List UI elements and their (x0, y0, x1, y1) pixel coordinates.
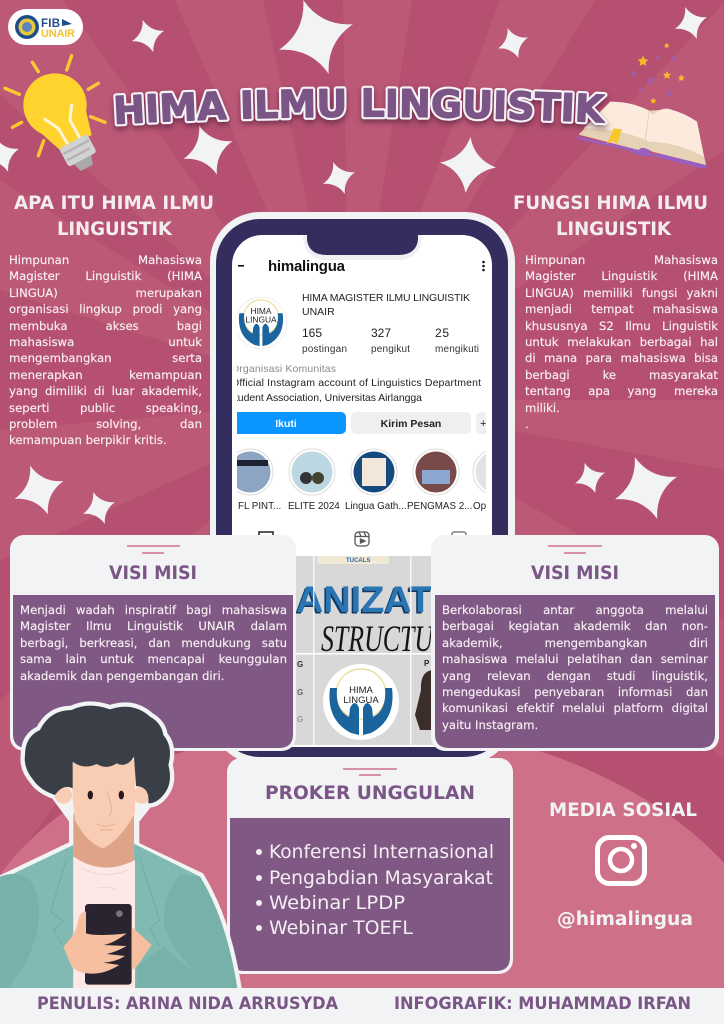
instagram profile screen: ELITE 2024 (288, 501, 340, 512)
text: visi misi left: Menjadi wadah inspiratif bagi mahasiswa (20, 603, 287, 617)
list: proker: Webinar TOEFL (269, 917, 413, 939)
footer bar (0, 988, 724, 1024)
neck (73, 813, 134, 870)
instagram profile screen: himalingua (268, 258, 346, 275)
media sosial handle: @himalingua (557, 909, 693, 930)
list: proker: Webinar LPDP (269, 892, 405, 914)
text block: apa itu: mahasiswa untuk (9, 335, 202, 349)
panel: proker unggulan (0, 706, 724, 1024)
text block: apa itu: seperti public speaking, (9, 401, 202, 415)
phone in hand (85, 904, 132, 985)
icon: open book with stars (575, 43, 708, 169)
text: visi misi right: Berkolaborasi antar anggota melalui (442, 603, 708, 617)
instagram profile screen: Organisasi Komunitas (231, 363, 336, 375)
list: proker (256, 841, 494, 939)
text block: apa itu (9, 252, 202, 452)
hima lingua logo: LINGUA (343, 695, 379, 706)
logo: FIB UNAIR: FIB (41, 18, 60, 30)
panel: visi misi right (431, 535, 719, 751)
icon: tagged tab (451, 531, 467, 535)
post grid: G (297, 660, 303, 669)
person illustration (0, 706, 237, 988)
text block: apa itu: Himpunan Mahasiswa (9, 253, 202, 267)
text block: fungsi: LINGUA) memiliki fungsi yakni (525, 286, 718, 300)
credit: penulis: PENULIS: ARINA NIDA ARRUSYDA (37, 994, 338, 1013)
icon: instagram (598, 838, 644, 884)
heading: visi misi: VISI MISI (531, 563, 619, 584)
text: visi misi right (442, 602, 708, 737)
text block: apa itu: menerapkan kemampuan (9, 368, 202, 382)
heading: proker: PROKER UNGGULAN (265, 783, 475, 804)
instagram profile screen: Official Instagram account of Linguistics Department (231, 377, 481, 389)
instagram profile screen: PENGMAS 2... (407, 501, 472, 512)
text block: fungsi: miliki. (525, 401, 560, 415)
text block: apa itu: yang dimiliki di luar akademik, (9, 384, 202, 398)
heading: apa itu: APA ITU HIMA ILMU (14, 193, 214, 214)
instagram profile screen: mengikuti (435, 344, 479, 355)
phone mockup (210, 212, 519, 764)
text block: apa itu: problem solving, dan (9, 417, 202, 431)
text: visi misi right: yaitu Instagram. (442, 718, 538, 732)
text block: apa itu: LINGUA) merupakan (9, 286, 202, 300)
story highlights (237, 448, 486, 496)
icon: light bulb (5, 56, 105, 175)
hima lingua logo: HIMA (349, 685, 374, 696)
text block: fungsi: tentang apa yang mereka (525, 384, 718, 398)
profile picture (235, 297, 287, 349)
text block: apa itu: mengembangkan serta (9, 351, 202, 365)
heading: apa itu (14, 193, 214, 240)
instagram profile screen: Lingua Gath... (345, 501, 407, 512)
text: visi misi right: komunikasi efektif melalui platform digital (442, 701, 708, 715)
text block: apa itu: Magister Linguistik (HIMA (9, 269, 202, 283)
text block: fungsi: Magister Linguistik (HIMA (525, 269, 718, 283)
title: HIMA ILMU LINGUISTIK (115, 88, 606, 124)
instagram profile screen: 327 (371, 326, 391, 340)
text block: fungsi: menjadi tempat mahasiswa (525, 302, 718, 316)
post grid: P (424, 659, 430, 668)
face (72, 760, 135, 848)
instagram profile screen: Opi (473, 501, 488, 512)
jacket (0, 843, 237, 988)
heading: fungsi: LINGUISTIK (556, 219, 672, 240)
list: proker: Konferensi Internasional (269, 841, 494, 863)
text: visi misi left: sama lain untuk mencapai keunggulan (20, 652, 287, 666)
text: visi misi left: berbagi, berkreasi, dan mendukung satu (20, 636, 287, 650)
shirt (73, 857, 135, 988)
instagram profile screen: HIMA MAGISTER ILMU LINGUISTIK (302, 292, 470, 304)
text block: fungsi: . (525, 417, 529, 431)
icon: reels tab (355, 532, 369, 546)
heading: visi misi: VISI MISI (109, 563, 197, 584)
text block: fungsi: di mana para mahasiswa bisa (525, 351, 718, 365)
instagram profile screen: UNAIR (302, 306, 335, 318)
hima lingua logo (323, 664, 399, 740)
ears (55, 786, 72, 804)
heading: apa itu: LINGUISTIK (57, 219, 173, 240)
logo: FIB UNAIR (8, 9, 83, 45)
credit: infografik: INFOGRAFIK: MUHAMMAD IRFAN (394, 994, 691, 1013)
text block: fungsi: untuk melakukan berbagai hal (525, 335, 718, 349)
instagram profile screen (237, 260, 486, 547)
text: visi misi right: berbagai kegiatan akademik dan non- (442, 619, 708, 633)
text block: fungsi (525, 252, 718, 442)
heading: fungsi: FUNGSI HIMA ILMU (513, 193, 708, 214)
post grid: G (297, 688, 303, 697)
decorative stars (0, 0, 713, 530)
logo: FIB UNAIR: UNAIR (41, 28, 75, 40)
instagram profile screen: Ikuti (275, 418, 297, 430)
panel: visi misi left (10, 535, 296, 751)
text: visi misi right: yang relevan dengan studi linguistik, (442, 669, 708, 683)
hair (25, 706, 170, 803)
title: HIMA ILMU LINGUISTIK (110, 86, 610, 132)
instagram profile screen: + (480, 418, 486, 430)
instagram profile screen: 165 (302, 326, 322, 340)
text: visi misi left (20, 602, 287, 692)
post grid: TUCALS (346, 558, 370, 564)
post grid: STRUCTU (321, 619, 435, 660)
list: proker: Pengabdian Masyarakat (269, 867, 493, 889)
instagram profile screen: pengikut (371, 344, 410, 355)
instagram profile screen: postingan (302, 344, 347, 355)
text: visi misi right: mengedukasi penyebaran informasi dan (442, 685, 708, 699)
media sosial heading: MEDIA SOSIAL (549, 800, 697, 821)
text: visi misi right: akademik, mengembangkan diri (442, 636, 708, 650)
post grid: ANIZAT (294, 580, 431, 622)
text: visi misi right: mahasiswa melalui pelatihan dan seminar (442, 652, 708, 666)
text: visi misi left: Magister Ilmu Linguistik UNAIR dalam (20, 619, 287, 633)
hands (63, 912, 127, 974)
instagram profile screen: FL PINT... (238, 501, 281, 512)
post grid (294, 556, 434, 745)
profile picture: LINGUA (245, 314, 277, 324)
instagram profile screen: Student Association, Universitas Airlangga (228, 392, 422, 404)
text block: fungsi: khususnya S2 Ilmu Linguistik (525, 319, 718, 333)
text block: fungsi: Himpunan Mahasiswa (525, 253, 718, 267)
post grid: G (297, 715, 303, 724)
eyes (88, 791, 93, 799)
instagram profile screen: 25 (435, 326, 449, 340)
heading: fungsi (513, 193, 708, 240)
text block: apa itu: organisasi lingkup prodi yang (9, 302, 202, 316)
post grid: ANIZAT (296, 579, 432, 620)
text block: apa itu: membuka akses bagi (9, 319, 202, 333)
icon: grid tab (258, 531, 274, 535)
text block: apa itu: kemampuan berpikir kritis. (9, 433, 167, 447)
instagram profile screen: Kirim Pesan (381, 418, 441, 430)
text: visi misi left: akademik dan pengembangan diri. (20, 669, 224, 683)
text block: fungsi: berbagi ke masyarakat (525, 368, 718, 382)
bottom pink hill (0, 720, 724, 1024)
profile picture: HIMA (251, 306, 272, 316)
